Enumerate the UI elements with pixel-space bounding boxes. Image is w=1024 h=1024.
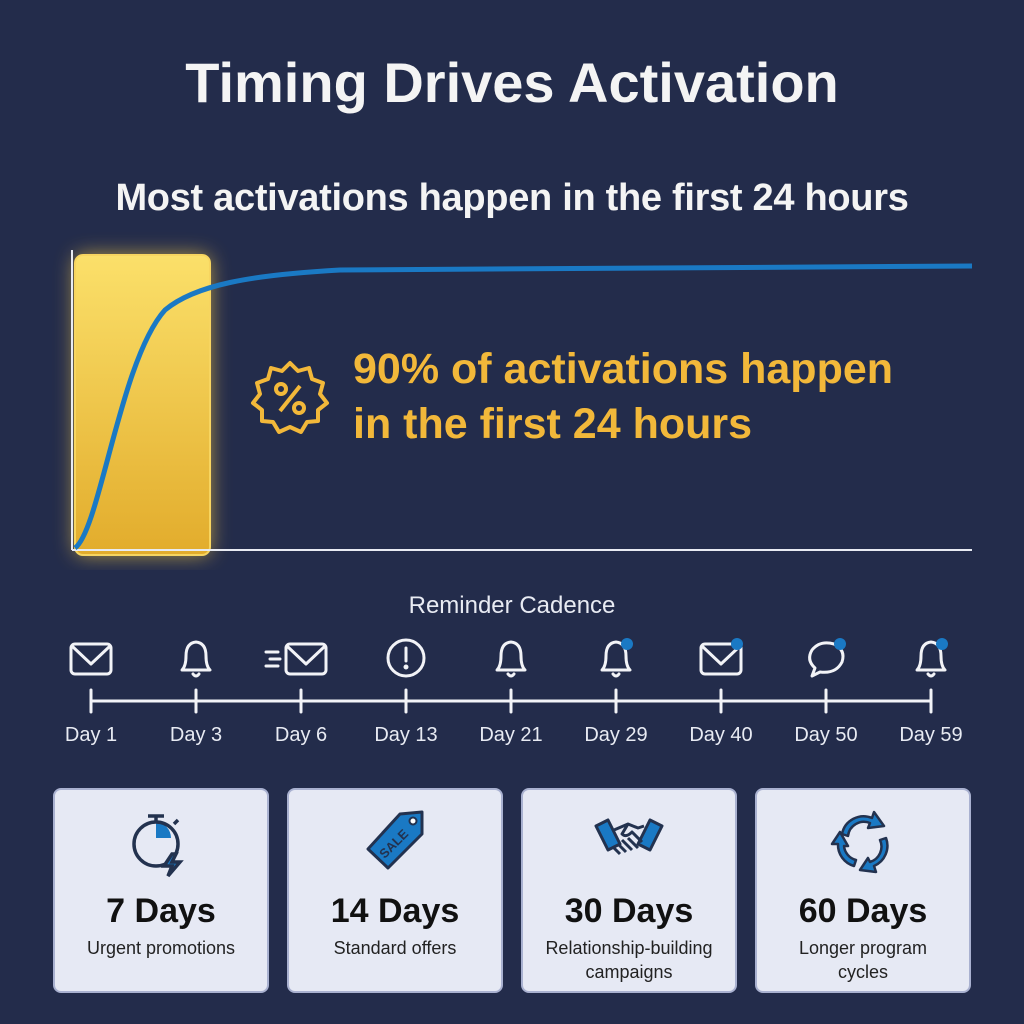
card: 14 days: 14 Days: [331, 892, 459, 930]
icon: fast mail: [266, 644, 326, 674]
card: 60 days: Longer program: [799, 938, 927, 958]
icon: percent badge: [250, 360, 330, 434]
icon: alert: [388, 640, 424, 676]
day labels: Day 59: [899, 724, 963, 746]
title: Timing Drives Activation: [185, 51, 839, 114]
chart: [60, 240, 972, 570]
icon: chat dot: [810, 638, 846, 676]
icon: cycle arrows: [830, 810, 889, 874]
card: 14 days: Standard offers: [334, 938, 456, 958]
icon: handshake: [594, 818, 664, 855]
day labels: Day 21: [479, 724, 543, 746]
day labels: Day 6: [275, 724, 327, 746]
day labels: Day 50: [794, 724, 858, 746]
icon: bell: [497, 642, 525, 676]
day labels: [65, 724, 963, 746]
card: 14 days: [287, 788, 503, 993]
card: 60 days: 60 Days: [799, 892, 927, 930]
day labels: Day 13: [374, 724, 438, 746]
highlight box: [75, 255, 210, 555]
icon: mail: [71, 644, 111, 674]
day labels: Day 29: [584, 724, 648, 746]
activation curve: [75, 266, 972, 548]
callout: 90% of activations happen: [353, 345, 893, 393]
day labels: Day 3: [170, 724, 222, 746]
timeline heading: Reminder Cadence: [409, 592, 615, 619]
callout: in the first 24 hours: [353, 400, 752, 448]
subtitle: Most activations happen in the first 24 hours: [115, 177, 909, 219]
card: 30 days: 30 Days: [565, 892, 693, 930]
icon: bell dot: [602, 638, 633, 676]
card: 7 days: [53, 788, 269, 993]
icon: mail dot: [701, 638, 743, 674]
icon: stopwatch: [132, 814, 184, 878]
card: 7 days: 7 Days: [106, 892, 216, 930]
icon: sale tag: SALE: [376, 826, 411, 861]
icon: sale tag: [366, 810, 424, 870]
callout: [353, 345, 893, 448]
card: 30 days: [521, 788, 737, 993]
day labels: Day 40: [689, 724, 753, 746]
card: 7 days: Urgent promotions: [87, 938, 235, 958]
icon: bell: [182, 642, 210, 676]
card: 60 days: [755, 788, 971, 993]
day labels: Day 1: [65, 724, 117, 746]
icon: bell dot: [917, 638, 948, 676]
card: 30 days: Relationship-building: [545, 938, 713, 958]
timeline: [70, 638, 948, 714]
card: 30 days: campaigns: [585, 962, 673, 982]
card: 60 days: cycles: [838, 962, 888, 982]
